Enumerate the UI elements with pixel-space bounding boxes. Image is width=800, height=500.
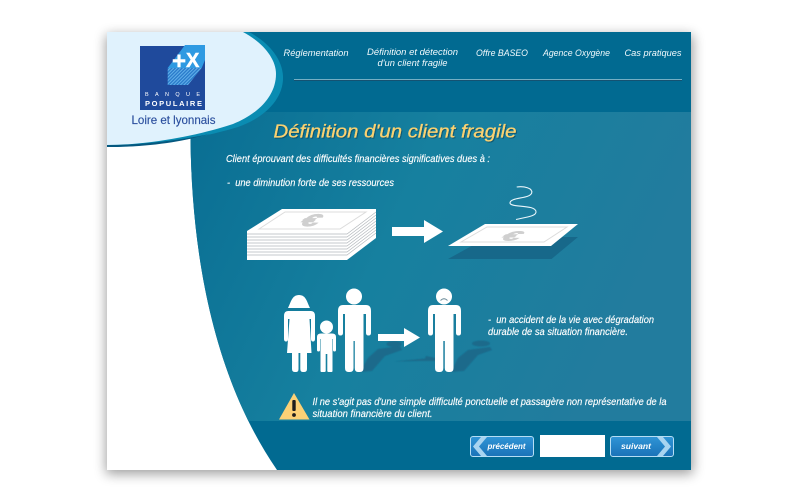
logo: Banque Populaire: X <box>186 50 200 72</box>
bullet: diminution of resources: - une diminution forte de ses ressources <box>227 177 395 189</box>
icon: child <box>317 320 336 372</box>
logo: Banque Populaire: POPULAIRE <box>145 99 202 108</box>
text: life accident: - un accident de la vie avec dégradation <box>488 314 654 326</box>
icon: stack of banknotes <box>247 209 376 260</box>
icon: single banknote with shadow <box>448 187 578 259</box>
navigation menu <box>284 47 682 68</box>
text: warning note: situation financière du client. <box>312 408 432 420</box>
button: suivant: suivant <box>621 442 651 451</box>
icon: warning triangle <box>279 393 310 420</box>
icon: mother <box>284 295 315 372</box>
navigation menu: Agence Oxygène <box>542 48 610 58</box>
logo panel curved header <box>107 32 283 147</box>
text: warning note: Il ne s'agit pas d'une simple difficulté ponctuelle et passagère non représentative de la <box>312 396 667 408</box>
icon: single banknote with shadow: € <box>496 228 530 244</box>
text: life accident <box>488 314 654 338</box>
icon: father <box>338 288 371 372</box>
text: warning note <box>312 396 667 420</box>
icon: figure shadows <box>360 340 492 372</box>
icon: sad person <box>428 288 461 372</box>
panel: lighter content band <box>190 112 691 421</box>
button: suivant <box>610 436 674 456</box>
white page-number box <box>540 435 605 457</box>
arrow: stack to single note <box>392 220 443 243</box>
navigation menu: Cas pratiques <box>624 48 682 58</box>
slide drop shadow <box>106 35 693 474</box>
navigation menu: Offre BASEO <box>476 48 528 58</box>
logo: Banque Populaire: BANQUE <box>145 92 200 98</box>
button: précédent: précédent <box>487 442 526 451</box>
title: Définition d'un client fragile <box>274 122 516 142</box>
logo caption: Loire et lyonnais <box>132 113 216 127</box>
panel: slide background <box>107 32 691 470</box>
arrow: family to single person <box>378 328 420 347</box>
navigation menu: Réglementation <box>284 48 348 58</box>
text: life accident: durable de sa situation financière. <box>488 326 628 338</box>
title: Définition d'un client fragile <box>274 122 518 142</box>
navigation menu: d'un client fragile <box>378 58 448 68</box>
logo: Banque Populaire: + <box>172 48 186 75</box>
intro text: Client éprouvant des difficultés financières significatives dues à : <box>226 153 490 165</box>
button: précédent <box>470 436 534 456</box>
logo: Banque Populaire <box>140 45 205 110</box>
navigation menu: Définition et détection <box>367 47 458 57</box>
icon: stack of banknotes: € <box>295 211 328 230</box>
